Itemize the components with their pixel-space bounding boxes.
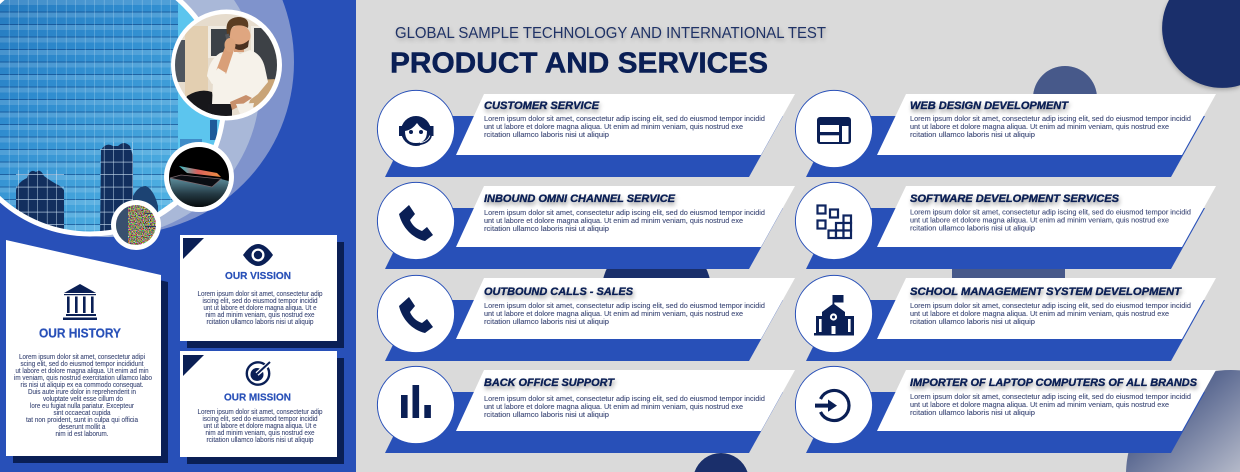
text: importer body <box>910 394 1191 417</box>
heading: customer service: CUSTOMER SERVICE <box>484 100 600 112</box>
text: history body: nim id est laborum. <box>56 431 109 438</box>
text: customer service body: Lorem ipsum dolor sit amet, consectetur adip iscing elit, sed do eiusmod tempor incidid <box>484 116 765 123</box>
text: mission body: iscing elit, sed do eiusmod tempor incidid <box>202 416 318 423</box>
text: web design body: rcitation ullamco laboris nisi ut aliquip <box>910 132 1035 139</box>
text: school body: Lorem ipsum dolor sit amet, consectetur adip iscing elit, sed do eiusmod tempor incidid <box>910 303 1191 310</box>
outer arc <box>0 0 294 234</box>
text: inbound body: rcitation ullamco laboris nisi ut aliquip <box>484 226 609 233</box>
text: customer service body: rcitation ullamco laboris nisi ut aliquip <box>484 132 609 139</box>
text: importer body: rcitation ullamco laboris nisi ut aliquip <box>910 410 1035 417</box>
text: history body: ris nisi ut aliquip ex ea commodo consequat. <box>20 382 144 389</box>
icon: headset agent <box>399 116 434 146</box>
icon: web layout <box>817 117 851 144</box>
text: outbound body <box>484 303 765 326</box>
text: history body: tat non proident, sunt in culpa qui officia <box>26 417 138 424</box>
text: importer body: Lorem ipsum dolor sit amet, consectetur adip iscing elit, sed do eiusmod tempor incidid <box>910 394 1191 401</box>
decorative circle: bottom right gradient <box>1126 370 1240 472</box>
text: history body: ut labore et dolore magna aliqua. Ut enim ad min <box>16 368 149 375</box>
icon: school <box>814 295 854 336</box>
icon: bank building <box>63 284 97 320</box>
heading: software development services: SOFTWARE DEVELOPMENT SERVICES <box>910 193 1120 205</box>
heading: inbound omni channel service: INBOUND OMNI CHANNEL SERVICE <box>484 193 676 205</box>
text: back office body <box>484 396 765 419</box>
photo: laptop <box>164 142 235 212</box>
text: web design body: Lorem ipsum dolor sit amet, consectetur adip iscing elit, sed do eiusmod tempor incidid <box>910 116 1191 123</box>
inner arc <box>0 0 260 237</box>
row: outbound calls - sales <box>377 275 795 361</box>
icon: bar chart <box>401 385 431 418</box>
text: back office body: Lorem ipsum dolor sit amet, consectetur adip iscing elit, sed do eiusmod tempor incidid <box>484 396 765 403</box>
text: mission body <box>198 409 323 444</box>
text: vission body: Lorem ipsum dolor sit amet, consectetur adip <box>198 291 323 298</box>
text: outbound body: rcitation ullamco laboris nisi ut aliquip <box>484 319 609 326</box>
text: mission body: Lorem ipsum dolor sit amet, consectetur adip <box>198 409 323 416</box>
text: software body: unt ut labore et dolore magna aliqua. Ut enim ad minim veniam, quis nostrud exe <box>910 218 1169 224</box>
text: history body: voluptate velit esse cillum do <box>43 396 123 403</box>
text: software body <box>910 210 1191 232</box>
text: software body: rcitation ullamco laboris nisi ut aliquip <box>910 226 1035 232</box>
panel: our vission <box>180 235 344 348</box>
text: software body: Lorem ipsum dolor sit amet, consectetur adip iscing elit, sed do eiusmod tempor incidid <box>910 210 1191 216</box>
text: history body: im veniam, quis nostrud exercitation ullamco labo <box>14 375 152 382</box>
left blue panel <box>0 0 356 472</box>
decorative circle: top right <box>1162 0 1240 88</box>
icon: import arrow <box>815 391 849 421</box>
heading: our history: OUR HISTORY <box>39 326 122 340</box>
icon: target <box>247 361 272 385</box>
text: customer service body <box>484 116 765 139</box>
text: school body: rcitation ullamco laboris nisi ut aliquip <box>910 319 1035 326</box>
icon: eye <box>243 244 273 266</box>
photo: man on the phone <box>170 10 285 120</box>
text: customer service body: unt ut labore et dolore magna aliqua. Ut enim ad minim veniam, quis nostrud exe <box>484 124 743 131</box>
photo: glass building <box>0 0 225 236</box>
decorative block: between right rows <box>952 262 1065 282</box>
row: software development services <box>795 182 1216 269</box>
text: inbound body <box>484 210 765 233</box>
heading: web design development: WEB DESIGN DEVELOPMENT <box>910 100 1069 112</box>
panel: our history <box>6 240 168 463</box>
heading: our vission: OUR VISSION <box>225 270 291 282</box>
text: vission body: rcitation ullamco laboris nisi ut aliquip <box>206 319 314 326</box>
text: web design body <box>910 116 1191 139</box>
header subtitle: GLOBAL SAMPLE TECHNOLOGY AND INTERNATIONAL TEST <box>395 25 827 42</box>
text: inbound body: Lorem ipsum dolor sit amet, consectetur adip iscing elit, sed do eiusmod tempor incidid <box>484 210 765 217</box>
text: vission body: iscing elit, sed do eiusmod tempor incidid <box>202 298 318 305</box>
decorative circle: behind web design row <box>1033 66 1097 130</box>
text: web design body: unt ut labore et dolore magna aliqua. Ut enim ad minim veniam, quis nostrud exe <box>910 124 1169 131</box>
text: back office body: rcitation ullamco laboris nisi ut aliquip <box>484 412 609 419</box>
row: school management system development <box>795 275 1216 361</box>
decorative circle: between left rows <box>602 237 712 347</box>
text: school body: unt ut labore et dolore magna aliqua. Ut enim ad minim veniam, quis nostrud exe <box>910 311 1169 318</box>
icon: phone <box>399 297 433 333</box>
text: mission body: unt ut labore et dolore magna aliqua. Ut e <box>204 423 317 430</box>
text: mission body: rcitation ullamco laboris nisi ut aliquip <box>206 437 314 444</box>
heading: importer of laptop computers: IMPORTER OF LAPTOP COMPUTERS OF ALL BRANDS <box>910 377 1198 389</box>
text: vission body: unt ut labore et dolore magna aliqua. Ut e <box>204 305 317 312</box>
heading: outbound calls - sales: OUTBOUND CALLS - SALES <box>484 286 634 298</box>
text: mission body: nim ad minim veniam, quis nostrud exe <box>206 430 315 437</box>
text: back office body: unt ut labore et dolore magna aliqua. Ut enim ad minim veniam, quis nostrud exe <box>484 404 743 411</box>
heading: our mission: OUR MISSION <box>224 392 291 404</box>
text: history body: sint occaecat cupida <box>54 410 111 417</box>
text: vission body: nim ad minim veniam, quis nostrud exe <box>206 312 315 319</box>
row: inbound omni channel service <box>377 182 795 269</box>
decorative circle: bottom centre <box>694 453 748 472</box>
row: customer service <box>377 90 795 177</box>
connector between small photos <box>155 201 178 217</box>
panel: our mission <box>180 351 344 464</box>
text: history body: Duis aute irure dolor in reprehenderit in <box>28 389 136 396</box>
text: outbound body: Lorem ipsum dolor sit amet, consectetur adip iscing elit, sed do eiusmod tempor incidid <box>484 303 765 310</box>
text: history body <box>14 354 152 438</box>
text: history body: scing elit, sed do eiusmod tempor incididunt <box>20 361 144 368</box>
row: web design development <box>795 90 1216 177</box>
heading: school management system development: SCHOOL MANAGEMENT SYSTEM DEVELOPMENT <box>910 286 1182 298</box>
text: history body: deserunt mollit a <box>58 424 106 431</box>
main title: PRODUCT AND SERVICES <box>390 48 768 80</box>
photo: small texture circle <box>111 200 161 250</box>
text: school body <box>910 303 1191 326</box>
row: back office support <box>377 366 795 453</box>
text: history body: Lorem ipsum dolor sit amet, consectetur adipi <box>19 354 145 361</box>
icon: phone <box>399 205 433 241</box>
text: vission body <box>198 291 323 326</box>
icon: software blocks <box>818 206 851 238</box>
row: importer of laptop computers <box>795 366 1216 453</box>
text: history body: lore eu fugiat nulla pariatur. Excepteur <box>30 403 135 410</box>
heading: back office support: BACK OFFICE SUPPORT <box>484 377 615 389</box>
text: importer body: unt ut labore et dolore magna aliqua. Ut enim ad minim veniam, quis nostrud exe <box>910 402 1169 409</box>
text: outbound body: unt ut labore et dolore magna aliqua. Ut enim ad minim veniam, quis nostrud exe <box>484 311 743 318</box>
text: inbound body: unt ut labore et dolore magna aliqua. Ut enim ad minim veniam, quis nostrud exe <box>484 218 743 225</box>
